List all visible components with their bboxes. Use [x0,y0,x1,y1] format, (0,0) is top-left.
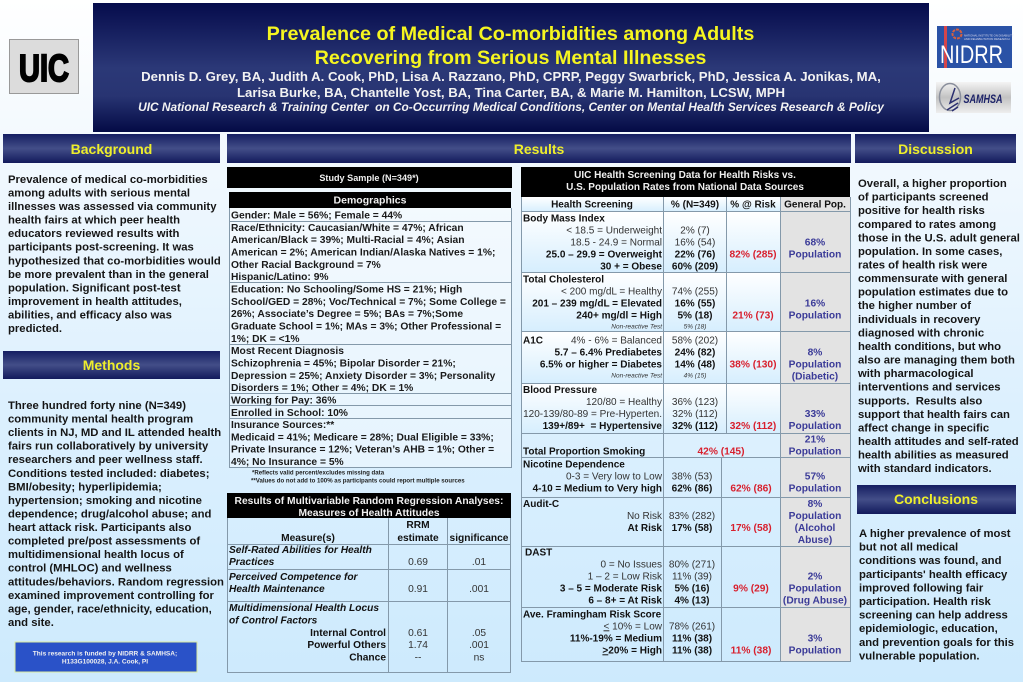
cholesterol row: 240+ mg/dl = High [576,310,662,322]
methods text: heart attack risk. Participants also [8,522,191,534]
affiliation: UIC National Research & Training Center on Co-Occurring Medical Conditions, Center on Mental Health Services Research & Policy [138,100,885,114]
A1C row: 5.7 – 6.4% Prediabetes [555,348,662,359]
discussion text: health abilities as measured [858,450,1009,462]
A1C row: 4% (15) [684,372,706,380]
race row [231,223,495,283]
column headers: % @ Risk [730,200,776,210]
A1C row: Non-reactive Test [611,372,663,380]
health screening table [521,167,850,662]
title: Prevalence of Medical Co-morbidities among Adults [267,23,754,45]
locus of control row: Multidimensional Health Locus [229,603,379,614]
logo: SAMHSA: SAMHSA [964,92,1002,106]
education row: School/GED = 28%; Voc/Technical = 7%; Some College = [231,297,506,308]
nicotine row: 38% (53) [672,471,712,482]
framingham row: 11% (38) [731,645,771,656]
methods text [8,400,224,629]
BMI row: 68% [805,238,825,248]
heading: Background [3,134,220,163]
conclusions text: and prevention goals for this [859,637,1014,649]
audit-c row: 17% (58) [730,523,772,534]
discussion text: also are managing them both [858,355,1015,367]
discussion text: rates of health risk were [858,260,987,272]
locus of control row [229,603,489,664]
DAST row: 2% [808,572,822,583]
conclusions text: but not all medical [859,542,958,554]
education row [231,284,506,345]
smoking row: 42% (145) [697,446,745,458]
audit-c row: No Risk [627,511,663,522]
health screening table: UIC Health Screening Data for Health Risks vs. [574,170,796,181]
cholesterol row: 5% (18) [684,324,706,330]
conclusions text: participants' health efficacy [859,569,1008,581]
methods text: Conditions tested included: diabetes; [8,468,209,480]
methods text: dependence; drug/alcohol abuse; and [8,508,211,520]
locus of control row: 0.61 [408,628,428,639]
working row: Working for Pay: 36% [231,396,336,406]
gender row: Gender: Male = 56%; Female = 44% [231,210,402,222]
background text: educators reviewed results with [8,228,179,240]
BMI row: < 18.5 = Underweight [566,226,662,236]
framingham row: 3% [808,633,822,644]
heading: Methods [3,351,220,379]
methods text: completed pre/post assessments of [8,536,200,548]
A1C row: (Diabetic) [792,372,838,383]
cholesterol row: 16% (55) [675,298,715,310]
education row: 1%; DK = <1% [231,334,299,345]
authors [141,69,881,100]
self-rated row: Self-Rated Abilities for Health [229,545,372,556]
DAST row: Population [789,584,841,595]
discussion text: health conditions, but who [858,341,1001,353]
race row: Race/Ethnicity: Caucasian/White = 47%; African [231,223,464,234]
self-rated row: 0.69 [408,557,428,568]
perceived competence row: .001 [469,584,489,595]
locus of control row: Powerful Others [307,640,386,651]
column headers [551,200,846,210]
A1C row: Population [789,360,841,371]
cholesterol row: 21% (73) [732,310,774,322]
methods text: hypertension; smoking and nicotine [8,495,202,507]
discussion text: commensurate with general [858,273,1007,285]
education row: Education: No Schooling/Some HS = 21%; High [231,284,462,296]
funding note: H133G100028, J.A. Cook, PI [62,658,148,666]
methods text: examined improvement controlling for [8,590,214,602]
discussion text: the higher number of [858,300,971,312]
race row: Other Racial Background = 7% [231,260,381,271]
cholesterol row: Total Cholesterol [523,274,604,286]
column headers [281,520,509,544]
framingham row: Population [789,645,841,656]
BMI row: 30 + = Obese [600,262,662,272]
header banner [93,3,929,132]
DAST row: 3 – 5 = Moderate Risk [560,584,662,595]
diagnosis row: Depression = 25%; Anxiety Disorder = 3%; Personality [231,371,496,382]
logo: NIDRR: AND REHABILITATION RESEARCH [964,37,1010,41]
column headers: estimate [397,533,439,544]
discussion text: supports. Results also [858,395,982,407]
locus of control row: Chance [349,652,386,664]
smoking row: Total Proportion Smoking [523,446,645,458]
cholesterol row: 201 – 239 mg/dL = Elevated [532,298,662,310]
conclusions text: conditions was found, and [859,555,1002,567]
background text: hypothesized that co-morbidities would [8,255,221,267]
audit-c row: 17% (58) [672,523,712,534]
heading: Discussion [855,134,1016,163]
background text: improvement in health attitudes, [8,296,182,308]
discussion text: those in the U.S. adult general [858,232,1020,244]
smoking row [523,434,841,458]
discussion text: compared to rates among [858,219,996,231]
cholesterol row: < 200 mg/dL = Healthy [561,286,662,298]
cholesterol row: 16% [805,298,825,310]
A1C row: 38% (130) [729,360,777,371]
heading: Conclusions [857,485,1016,514]
nicotine row: Nicotine Dependence [523,459,625,470]
cholesterol row: Non-reactive Test [611,324,663,330]
A1C row: 24% (82) [675,348,715,359]
BMI row: 22% (76) [675,250,715,260]
discussion text: health attitudes and self-rated [858,436,1019,448]
BMI row [523,214,841,272]
background text: health fairs at which peer health [8,214,180,226]
health screening table: U.S. Population Rates from National Data Sources [566,182,804,193]
DAST row: 1 – 2 = Low Risk [588,572,663,583]
blood pressure row: 120-139/80-89 = Pre-Hyperten. [523,409,662,420]
study sample bar: Study Sample (N=349*) [319,173,419,183]
locus of control row: .001 [469,640,489,651]
discussion text: population estimates due to [858,287,1008,299]
nicotine row: 62% (86) [672,483,712,494]
conclusions text: vulnerable population. [859,650,980,662]
background text: participants post-screening. It was [8,242,194,254]
nicotine row: 57% [805,471,825,482]
DAST row: 5% (16) [674,584,710,595]
audit-c row [523,499,841,546]
insurance row: Private Insurance = 12%; Veteran’s AHB = 1%; Other = [231,444,494,456]
background text: be more prevalent than in the general [8,269,209,281]
DAST row: 6 – 8+ = At Risk [588,596,662,607]
heading: Results [227,134,851,163]
diagnosis row: Most Recent Diagnosis [231,346,344,357]
nicotine row: 4-10 = Medium to Very high [533,483,662,494]
DAST row [525,548,847,607]
conclusions text: improved following fair [859,582,984,594]
BMI row: Body Mass Index [523,214,605,224]
framingham row: >20% = High [602,645,662,656]
cholesterol row [523,274,841,330]
BMI row: 18.5 - 24.9 = Normal [570,238,662,248]
authors: Larisa Burke, BA, Chantelle Yost, BA, Tina Carter, BA, & Marie M. Hamilton, LCSW, MPH [237,85,785,100]
methods text: control (MHLOC) and wellness [8,563,172,575]
logo: NIDRR [937,26,1014,69]
demographics table [229,192,512,468]
framingham row [523,609,841,656]
column headers: % (N=349) [671,200,719,210]
A1C row: 6.5% or higher = Diabetes [540,360,662,371]
methods text: Three hundred forty nine (N=349) [8,400,186,412]
DAST row: DAST [525,548,553,559]
locus of control row: .05 [472,628,486,639]
framingham row: Ave. Framingham Risk Score [523,609,662,620]
blood pressure row: 36% (123) [672,397,718,408]
methods text: age, gender, race/ethnicity, education, [8,603,212,615]
diagnosis row: Disorders = 1%; Other = 4%; DK = 1% [231,383,413,394]
title [267,23,754,69]
BMI row: 16% (54) [675,238,715,248]
discussion text: interventions and services [858,382,1001,394]
background text: predicted. [8,323,62,335]
race row: Hispanic/Latino: 9% [231,272,329,283]
cholesterol row: Population [789,310,841,322]
heading: Results: Results [514,141,564,157]
framingham row: 11% (38) [672,645,712,656]
methods text: clients in NJ, MD and IL attended health [8,427,221,439]
BMI row: Population [789,250,841,260]
locus of control row: -- [415,652,421,664]
self-rated row: .01 [472,557,486,568]
locus of control row: of Control Factors [229,616,318,626]
discussion text: population. In some cases, [858,246,1002,258]
heading: Conclusions: Conclusions [894,491,978,507]
conclusions text: A higher prevalence of most [859,528,1011,540]
insurance row: 4%; No Insurance = 5% [231,457,344,468]
background text: Prevalence of medical co-morbidities [8,174,208,186]
framingham row: 11% (38) [672,633,712,644]
table footnotes [251,470,465,484]
nicotine row: 62% (86) [730,483,772,494]
methods text: multidimensional health locus of [8,549,184,561]
smoking row: 21% [805,435,825,446]
insurance row: Insurance Sources:** [231,420,334,431]
discussion text: affect change in specific [858,422,989,434]
conclusions text: screening can help address [859,610,1008,622]
audit-c row: Audit-C [523,499,559,510]
methods text: researchers and peer wellness staff. [8,454,203,466]
locus of control row: 1.74 [408,640,428,651]
blood pressure row: 33% [805,409,825,420]
perceived competence row: 0.91 [408,584,428,595]
methods text: community mental health program [8,414,193,426]
insurance row [231,420,494,468]
perceived competence row: Perceived Competence for [229,572,359,583]
nicotine row: 0-3 = Very low to Low [566,471,663,482]
framingham row: < 10% = Low [604,621,663,632]
race row: American = 2%; American Indian/Alaska Natives = 1%; [231,248,495,258]
conclusions text: participation. Health risk [859,596,992,608]
logo: NIDRR: NATIONAL INSTITUTE ON DISABILITY [964,34,1014,38]
column headers: RRM [406,520,430,531]
race row: American/Black = 39%; Multi-Racial = 4%; Asian [231,235,465,246]
DAST row: 80% (271) [669,560,715,571]
education row: Graduate School = 1%; MAs = 3%; Other Professional = [231,322,501,332]
background text: among adults with serious mental [8,188,190,200]
cholesterol row: 74% (255) [672,286,718,298]
discussion text: Overall, a higher proportion [858,178,1007,190]
methods text: attitudes/behaviors. Random regression [8,576,224,588]
blood pressure row [523,385,841,432]
logo: NIDRR: NIDRR [940,41,1003,69]
blood pressure row: 32% (112) [672,421,718,432]
conclusions text: epidemiologic, education, [859,623,998,635]
column headers: General Pop. [784,200,846,210]
audit-c row: At Risk [627,523,662,534]
regression table: Measures of Health Attitudes [298,508,440,519]
discussion text: positive for health risks [858,205,985,217]
demographics table: Demographics [334,194,407,206]
BMI row: 82% (285) [729,250,777,260]
A1C row [523,336,841,383]
table footnotes: *Reflects valid percent/excludes missing data [252,470,385,476]
background text [8,174,221,335]
study sample bar [227,167,512,188]
heading: Discussion: Discussion [898,141,973,157]
background text: abilities, and efficacy also was [8,310,172,322]
logo: UIC: UIC [19,48,69,90]
locus of control row: Internal Control [310,628,386,639]
A1C row: 8% [808,348,822,359]
DAST row: 0 = No Issues [600,560,662,571]
blood pressure row: Population [789,421,841,432]
blood pressure row: Blood Pressure [523,385,597,396]
discussion text: support that health fairs can [858,409,1010,421]
column headers: significance [450,533,509,544]
methods text: and site. [8,617,54,629]
insurance row: Medicaid = 41%; Medicare = 28%; Dual Eligible = 33%; [231,432,494,444]
logo: UIC [10,40,78,94]
discussion text: diagnosed with chronic [858,327,984,339]
methods text: BMI/obesity; hyperlipidemia; [8,481,162,493]
table footnotes: **Values do not add to 100% as participants could report multiple sources [251,478,465,484]
funding note [15,642,197,672]
nicotine row [523,459,841,494]
diagnosis row: Schizophrenia = 45%; Bipolar Disorder = 21%; [231,358,456,370]
A1C row: 14% (48) [675,360,715,371]
perceived competence row [229,572,489,595]
blood pressure row: 32% (112) [672,409,718,420]
heading: Methods: Methods [83,357,140,373]
DAST row: (Drug Abuse) [783,596,847,607]
audit-c row: (Alcohol [795,523,836,534]
logo: SAMHSA [936,82,1011,113]
title: Recovering from Serious Mental Illnesses [315,47,706,69]
discussion text: with pharmacological [857,368,974,380]
discussion text: of participants screened [858,192,989,204]
perceived competence row: Health Maintenance [229,584,325,595]
framingham row: 11%-19% = Medium [570,633,662,644]
blood pressure row: 32% (112) [730,421,776,432]
school row: Enrolled in School: 10% [231,408,348,419]
regression table: Results of Multivariable Random Regression Analyses: [235,496,503,507]
audit-c row: 8% [808,499,822,510]
funding note: This research is funded by NIDRR & SAMHSA; [33,650,177,658]
nicotine row: Population [789,483,841,494]
DAST row: 4% (13) [674,596,710,607]
DAST row: 11% (39) [672,572,712,583]
cholesterol row: 5% (18) [677,310,713,322]
audit-c row: Population [789,511,841,522]
authors: Dennis D. Grey, BA, Judith A. Cook, PhD, Lisa A. Razzano, PhD, CPRP, Peggy Swarbrick, PhD, Jessica A. Jonikas, MA, [141,69,881,84]
audit-c row: Abuse) [798,535,832,546]
background text: illnesses was assessed via community [8,201,217,213]
column headers: Measure(s) [281,533,335,544]
self-rated row: Practices [229,557,275,568]
education row: 26%; Associate’s Degree = 5%; BAs = 7%;Some [231,309,463,320]
BMI row: 25.0 – 29.9 = Overweight [546,250,663,260]
BMI row: 60% (209) [672,262,718,272]
regression table [227,493,511,672]
methods text: fairs run collaboratively by university [8,441,209,453]
blood pressure row: 120/80 = Healthy [586,397,662,408]
discussion text: with standard indicators. [857,463,992,475]
background text: population. Significant post-test [8,282,181,294]
framingham row: 78% (261) [669,621,715,632]
discussion text: individuals in recovery [858,314,981,326]
A1C row: 4% - 6% = Balanced [571,336,662,347]
discussion text [857,178,1020,475]
DAST row: 9% (29) [733,584,769,595]
A1C row: 58% (202) [672,336,718,347]
blood pressure row: 139+/89+ = Hypertensive [543,421,662,432]
audit-c row: 83% (282) [669,511,715,522]
smoking row: Population [789,447,841,458]
diagnosis row [231,346,496,394]
self-rated row [229,545,486,568]
conclusions text [859,528,1014,662]
column headers: Health Screening [551,200,633,210]
heading: Background: Background [71,141,152,157]
BMI row: 2% (7) [680,226,710,236]
A1C row: A1C [523,336,543,347]
locus of control row: ns [474,652,484,664]
